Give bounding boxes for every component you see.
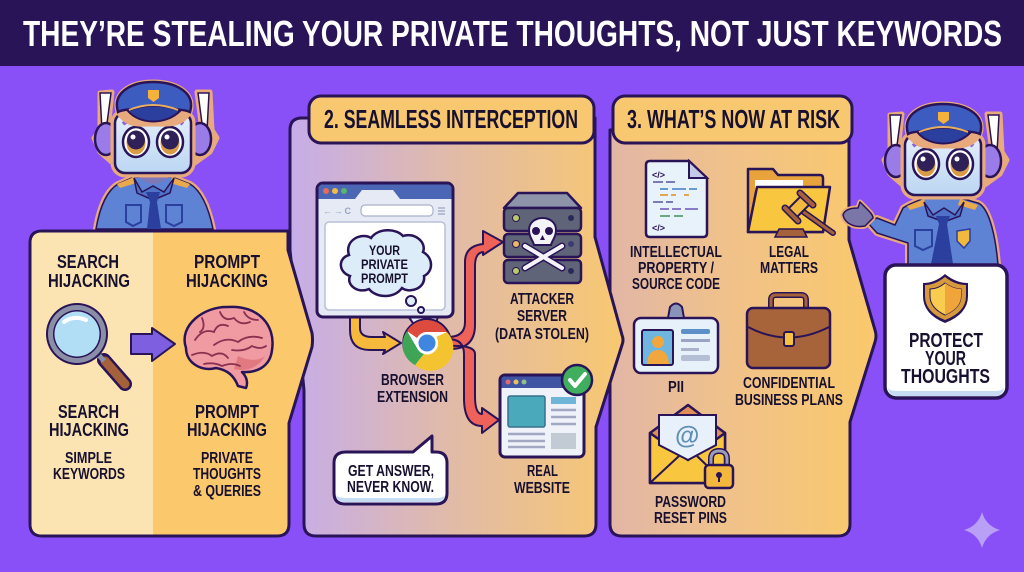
panel 2 heading: 2. SEAMLESS INTERCEPTION bbox=[324, 104, 578, 134]
label: browser extension: BROWSER bbox=[381, 372, 444, 389]
heading: search hijacking bbox=[48, 251, 130, 291]
label: browser extension bbox=[377, 372, 448, 406]
label: search hijacking simple keywords bbox=[49, 401, 129, 483]
heading: prompt hijacking bbox=[186, 251, 268, 291]
callout: get answer, never know bbox=[334, 436, 447, 504]
browser window bbox=[317, 183, 453, 326]
label: legal matters bbox=[760, 244, 818, 277]
panel 2 heading bbox=[309, 96, 594, 143]
browser window: ← → C bbox=[323, 206, 352, 216]
heading: search hijacking: HIJACKING bbox=[48, 270, 130, 291]
label: intellectual property: INTELLECTUAL bbox=[630, 244, 722, 261]
panel 3 heading bbox=[613, 96, 852, 143]
red arrow: to attacker server bbox=[448, 231, 503, 349]
label: prompt hijacking private thoughts: & QUERIES bbox=[193, 483, 261, 500]
label: legal matters: MATTERS bbox=[760, 260, 818, 277]
callout: protect your thoughts: THOUGHTS bbox=[901, 366, 990, 388]
robot guide: left bbox=[94, 82, 217, 229]
label: pii: PII bbox=[668, 379, 684, 396]
panel 2: seamless interception bbox=[290, 96, 623, 536]
heading: prompt hijacking: HIJACKING bbox=[186, 270, 268, 291]
label: prompt hijacking private thoughts: THOUGHTS bbox=[193, 466, 261, 483]
icon: attacker server with skull bbox=[504, 193, 581, 283]
label: real website: REAL bbox=[527, 463, 558, 480]
icon: legal folder with gavel bbox=[748, 169, 833, 237]
callout: get answer, never know: NEVER KNOW. bbox=[347, 479, 434, 496]
label: confidential business plans bbox=[735, 375, 843, 409]
icon: sparkle watermark bbox=[964, 512, 1000, 548]
title banner bbox=[0, 0, 1024, 66]
red arrow: to real website bbox=[448, 339, 499, 433]
icon: briefcase bbox=[747, 295, 830, 368]
label: attacker server: ATTACKER bbox=[510, 291, 574, 308]
label: password reset pins: PASSWORD bbox=[655, 494, 726, 511]
label: intellectual property: SOURCE CODE bbox=[632, 276, 720, 293]
icon: shield bbox=[923, 274, 968, 323]
label: search hijacking simple keywords: KEYWORDS bbox=[53, 466, 125, 483]
robot guide: right, pointing bbox=[843, 104, 1007, 265]
thought cloud: your private prompt: PROMPT bbox=[361, 271, 409, 286]
label: search hijacking simple keywords: SEARCH bbox=[58, 401, 119, 422]
label: browser extension: EXTENSION bbox=[377, 389, 448, 406]
icon: source code document: </> bbox=[652, 170, 665, 180]
label: legal matters: LEGAL bbox=[769, 244, 809, 261]
thought cloud: your private prompt: PRIVATE bbox=[361, 257, 408, 272]
label: search hijacking simple keywords: SIMPLE bbox=[65, 450, 112, 467]
thought cloud: your private prompt bbox=[341, 230, 431, 313]
label: prompt hijacking private thoughts: HIJACKING bbox=[187, 419, 267, 440]
panel 3: what's now at risk bbox=[610, 96, 876, 536]
label: real website bbox=[514, 463, 570, 497]
icon: source code document: </> bbox=[652, 223, 665, 233]
label: attacker server: SERVER bbox=[517, 308, 567, 325]
panel 1: search vs prompt hijacking bbox=[30, 231, 312, 536]
label: password reset pins bbox=[654, 494, 727, 527]
yellow arrow: prompt to extension bbox=[350, 317, 401, 354]
label: confidential business plans: BUSINESS PLANS bbox=[735, 392, 843, 409]
heading: prompt hijacking: PROMPT bbox=[194, 251, 261, 272]
label: real website: WEBSITE bbox=[514, 480, 570, 497]
label: prompt hijacking private thoughts: PRIVATE bbox=[201, 450, 253, 467]
label: prompt hijacking private thoughts: PROMPT bbox=[195, 401, 260, 422]
label: password reset pins: RESET PINS bbox=[654, 510, 727, 527]
icon: real website with check bbox=[500, 365, 592, 457]
icon: envelope with lock bbox=[650, 405, 733, 488]
label: confidential business plans: CONFIDENTIAL bbox=[743, 375, 835, 392]
label: attacker server bbox=[495, 291, 589, 343]
label: search hijacking simple keywords: HIJACKING bbox=[49, 419, 129, 440]
arrow: search to prompt bbox=[131, 328, 175, 361]
icon: browser extension chrome logo bbox=[403, 320, 453, 371]
label: attacker server: (DATA STOLEN) bbox=[495, 326, 589, 343]
icon: id card bbox=[634, 304, 718, 373]
label: prompt hijacking private thoughts bbox=[187, 401, 267, 500]
callout: protect your thoughts: YOUR bbox=[925, 348, 966, 370]
callout: protect your thoughts bbox=[885, 265, 1007, 398]
callout: get answer, never know: GET ANSWER, bbox=[348, 463, 434, 480]
icon: brain bbox=[185, 307, 273, 388]
icon: magnifying glass bbox=[46, 303, 125, 384]
heading: search hijacking: SEARCH bbox=[57, 251, 119, 272]
label: intellectual property: PROPERTY / bbox=[638, 260, 714, 277]
icon: source code document bbox=[646, 161, 707, 237]
panel 3 heading: 3. WHAT’S NOW AT RISK bbox=[627, 104, 840, 134]
thought cloud: your private prompt: YOUR bbox=[369, 243, 400, 258]
callout: protect your thoughts: PROTECT bbox=[909, 330, 983, 352]
icon: envelope with lock: @ bbox=[675, 422, 699, 450]
label: intellectual property bbox=[630, 244, 722, 293]
